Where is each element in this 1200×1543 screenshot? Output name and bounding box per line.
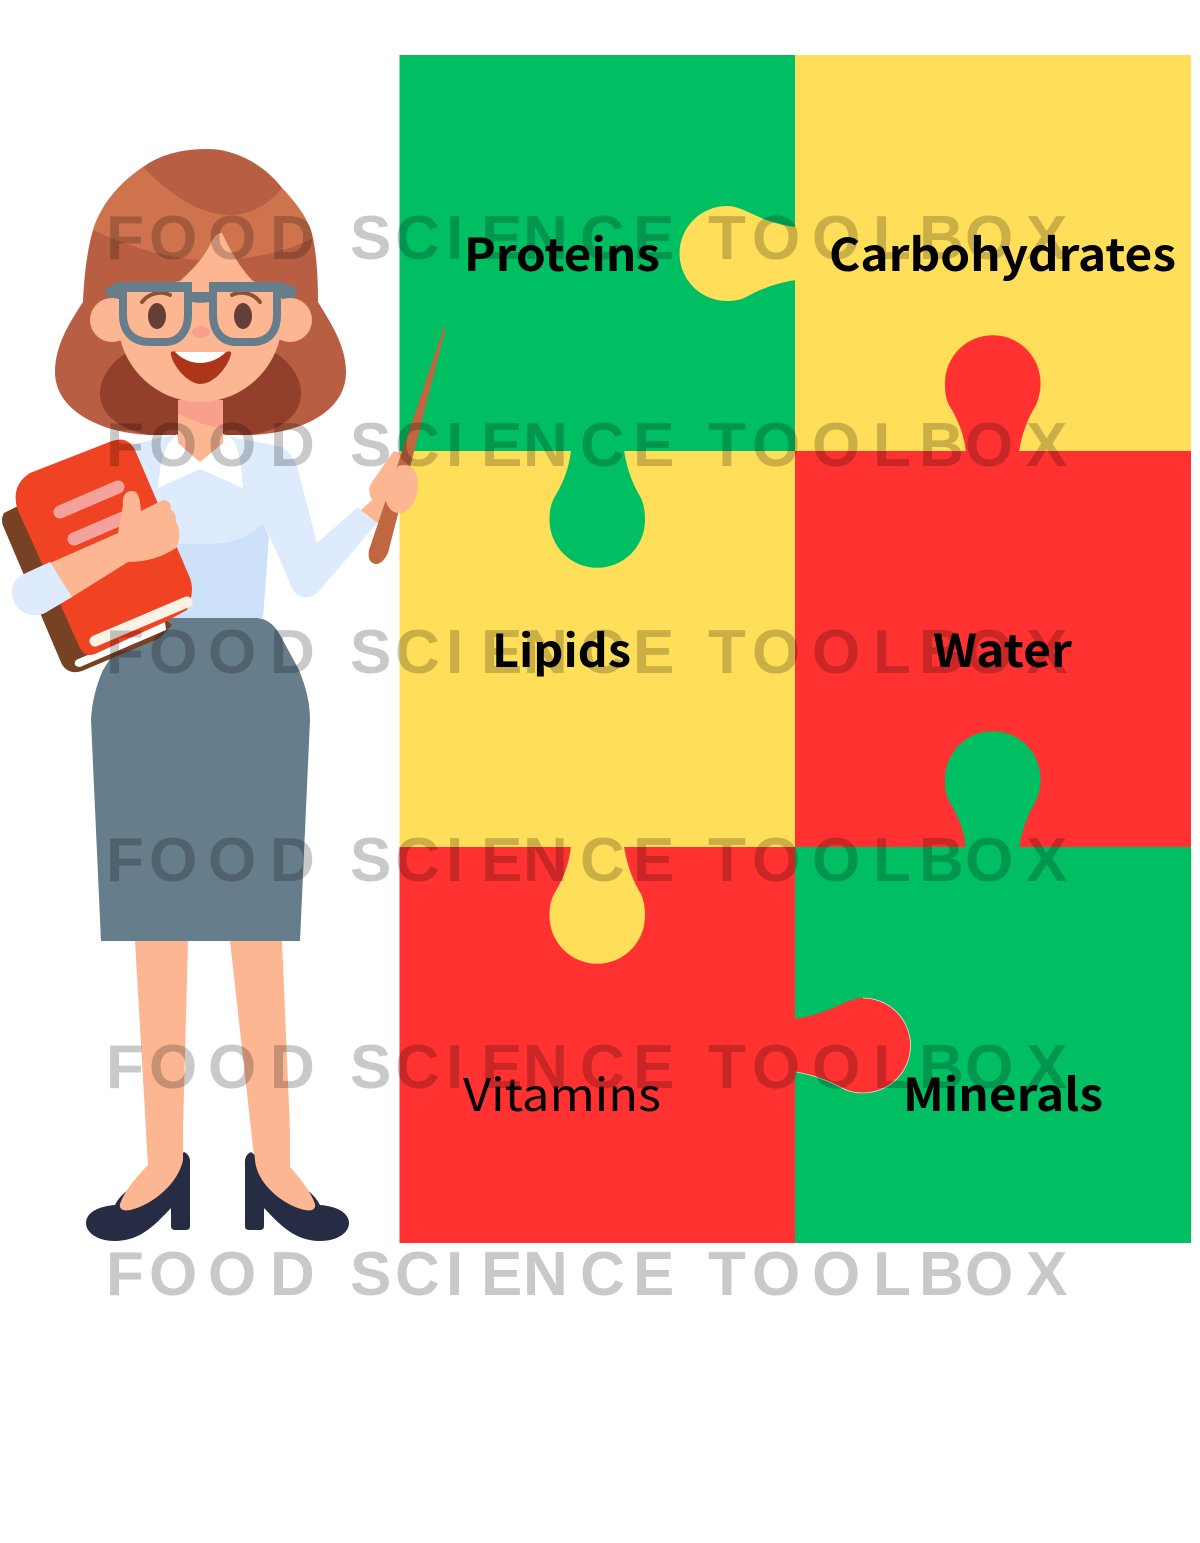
ears — [90, 298, 312, 342]
teacher character — [2, 149, 446, 1241]
panel: lipids — [400, 451, 796, 847]
panel: water — [795, 451, 1191, 847]
watermark row 6: FOOD SCIENCE TOOLBOX — [106, 1240, 1067, 1309]
puzzle tab: red into minerals — [794, 998, 911, 1093]
blouse lower torso — [150, 520, 269, 618]
puzzle grid — [400, 55, 1191, 1243]
puzzle tab: yellow into proteins — [680, 206, 796, 301]
sleeve cuff — [12, 562, 72, 615]
teeth — [175, 352, 226, 363]
skirt — [91, 618, 310, 941]
puzzle tab: green into water — [945, 731, 1040, 848]
watermark row 5: FOOD SCIENCE TOOLBOX — [106, 1033, 1067, 1102]
eyes — [148, 303, 252, 329]
book labels — [60, 487, 123, 539]
watermark row 3: FOOD SCIENCE TOOLBOX — [106, 618, 1067, 687]
blouse — [133, 435, 377, 597]
feet — [120, 1130, 315, 1210]
watermark row 1: FOOD SCIENCE TOOLBOX — [106, 204, 1067, 273]
watermark — [106, 204, 1067, 1309]
panel: proteins — [400, 55, 796, 451]
tab outline — [796, 998, 911, 1093]
face — [118, 233, 282, 402]
book cover — [16, 440, 192, 655]
pointer stick — [369, 327, 446, 564]
label: water: Water — [933, 615, 1072, 680]
glasses — [105, 282, 296, 342]
puzzle tab: green into lipids — [550, 450, 645, 568]
hair shadow — [100, 353, 301, 435]
fist — [385, 465, 418, 513]
arm holding book — [50, 491, 179, 597]
panel: vitamins — [400, 847, 796, 1243]
hair back — [55, 149, 346, 435]
hair highlight — [93, 167, 313, 260]
labels — [463, 219, 1176, 1124]
book page edge — [95, 602, 187, 641]
watermark row 2: FOOD SCIENCE TOOLBOX — [106, 411, 1067, 480]
puzzle tab: yellow into vitamins — [550, 846, 645, 964]
eyebrows — [142, 293, 260, 302]
label: carbohydrates: Carbohydrates — [829, 219, 1176, 284]
nose — [192, 326, 210, 338]
legs — [120, 941, 320, 1212]
book pages — [75, 622, 166, 667]
panel: minerals — [795, 847, 1191, 1243]
label: minerals: Minerals — [903, 1059, 1103, 1124]
label: lipids: Lipids — [492, 615, 631, 680]
label: vitamins: Vitamins — [463, 1059, 661, 1124]
label: proteins: Proteins — [464, 219, 660, 284]
mouth — [171, 351, 231, 384]
panel: carbohydrates — [795, 55, 1191, 451]
back of hand — [361, 452, 405, 523]
watermark row 4: FOOD SCIENCE TOOLBOX — [106, 826, 1067, 895]
shoes — [86, 1152, 349, 1241]
collar — [158, 434, 243, 488]
puzzle tab: red into carbohydrates — [945, 335, 1040, 452]
neck — [178, 400, 223, 462]
book back cover — [2, 506, 172, 672]
neck shadow — [178, 400, 223, 429]
